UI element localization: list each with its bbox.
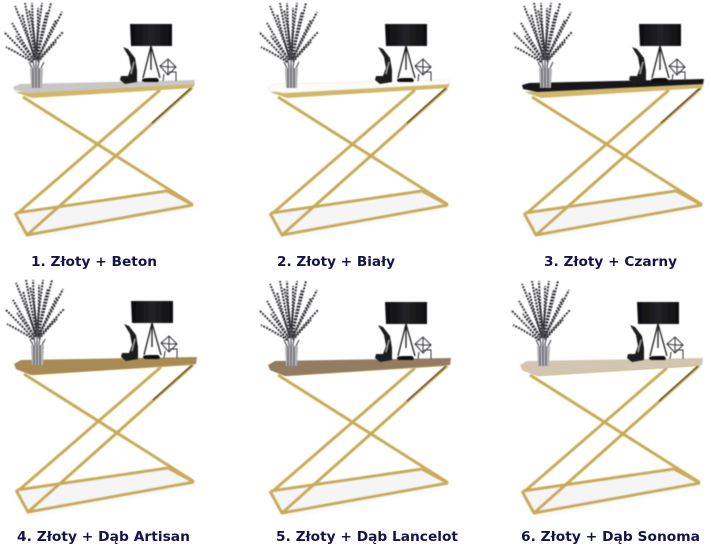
label 1: 1. Złoty + Beton <box>31 255 157 270</box>
tabletop: black <box>522 79 704 92</box>
table 5: gold + lancelot oak <box>259 281 453 518</box>
label 3: 3. Złoty + Czarny <box>544 255 678 270</box>
tabletop: concrete <box>13 80 195 93</box>
table 4: gold + artisan oak <box>5 280 199 517</box>
tabletop: white <box>268 80 450 93</box>
label 2: 2. Złoty + Biały <box>277 255 396 270</box>
table 6: gold + sonoma oak <box>511 281 705 518</box>
table 1: gold + concrete <box>4 3 198 240</box>
label 5: 5. Złoty + Dąb Lancelot <box>276 530 458 545</box>
tabletop: lancelot oak <box>268 358 451 376</box>
tabletop: artisan oak <box>14 357 197 375</box>
table 2: gold + white <box>259 3 453 240</box>
label 6: 6. Złoty + Dąb Sonoma <box>521 530 700 545</box>
label 4: 4. Złoty + Dąb Artisan <box>17 530 190 545</box>
table 3: gold + black <box>513 3 707 240</box>
tabletop: sonoma oak <box>520 358 703 376</box>
